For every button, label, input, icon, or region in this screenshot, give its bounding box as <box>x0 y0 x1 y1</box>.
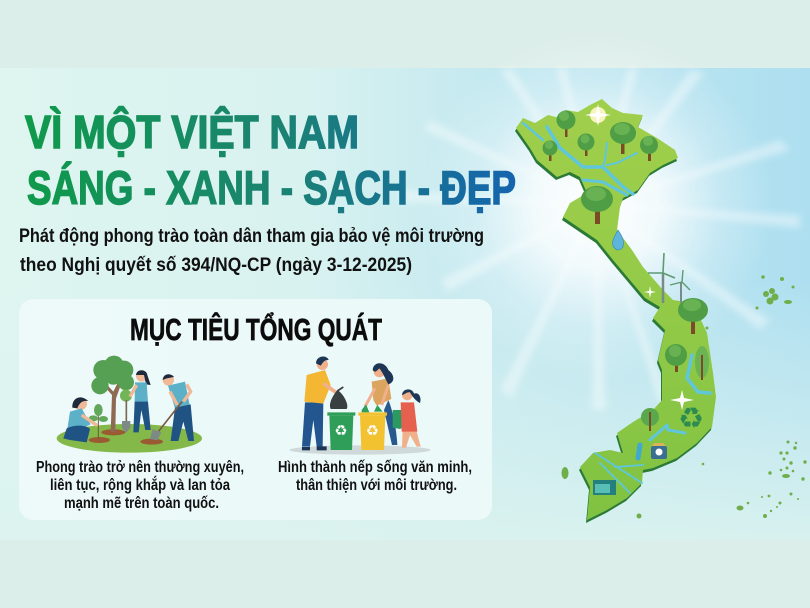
title: VÌ MỘT VIỆT NAM <box>25 106 359 158</box>
sun rays <box>400 30 800 410</box>
caption: planting: Phong trào trở nên thường xuyên, <box>36 459 244 476</box>
caption: planting: mạnh mẽ trên toàn quốc. <box>64 495 219 512</box>
title: SÁNG - XANH - SẠCH - ĐẸP <box>27 161 516 214</box>
tree icons <box>542 110 709 431</box>
caption: family <box>278 459 472 494</box>
islands <box>562 275 807 518</box>
icon: water drop <box>613 230 624 250</box>
icon: recycling: ♻ <box>678 401 704 435</box>
subtitle: Phát động phong trào toàn dân tham gia bảo vệ môi trường <box>19 225 484 247</box>
icon: recycling bag <box>651 443 667 459</box>
panel heading: MỤC TIÊU TỔNG QUÁT <box>130 311 382 347</box>
map of Vietnam <box>515 99 807 523</box>
rivers <box>523 123 710 493</box>
caption: planting: liên tục, rộng khắp và lan tỏa <box>50 476 230 494</box>
illustration: family sorting waste: ♻ <box>366 423 379 440</box>
caption: planting <box>36 459 244 512</box>
icon: wind turbines <box>648 253 690 303</box>
caption: family: Hình thành nếp sống văn minh, <box>278 459 472 476</box>
map land <box>515 99 716 523</box>
caption: family: thân thiện với môi trường. <box>296 477 457 494</box>
illustration: planting trees <box>57 356 202 453</box>
illustration: family sorting waste: ♻ <box>334 423 348 440</box>
title <box>25 106 516 214</box>
panel: general goals <box>19 299 492 520</box>
sparkles <box>585 104 694 410</box>
subtitle: theo Nghị quyết số 394/NQ-CP (ngày 3-12-2025) <box>20 254 412 276</box>
subtitle <box>19 225 484 276</box>
icon: building sign <box>593 480 616 495</box>
illustration: family sorting waste <box>289 357 431 455</box>
